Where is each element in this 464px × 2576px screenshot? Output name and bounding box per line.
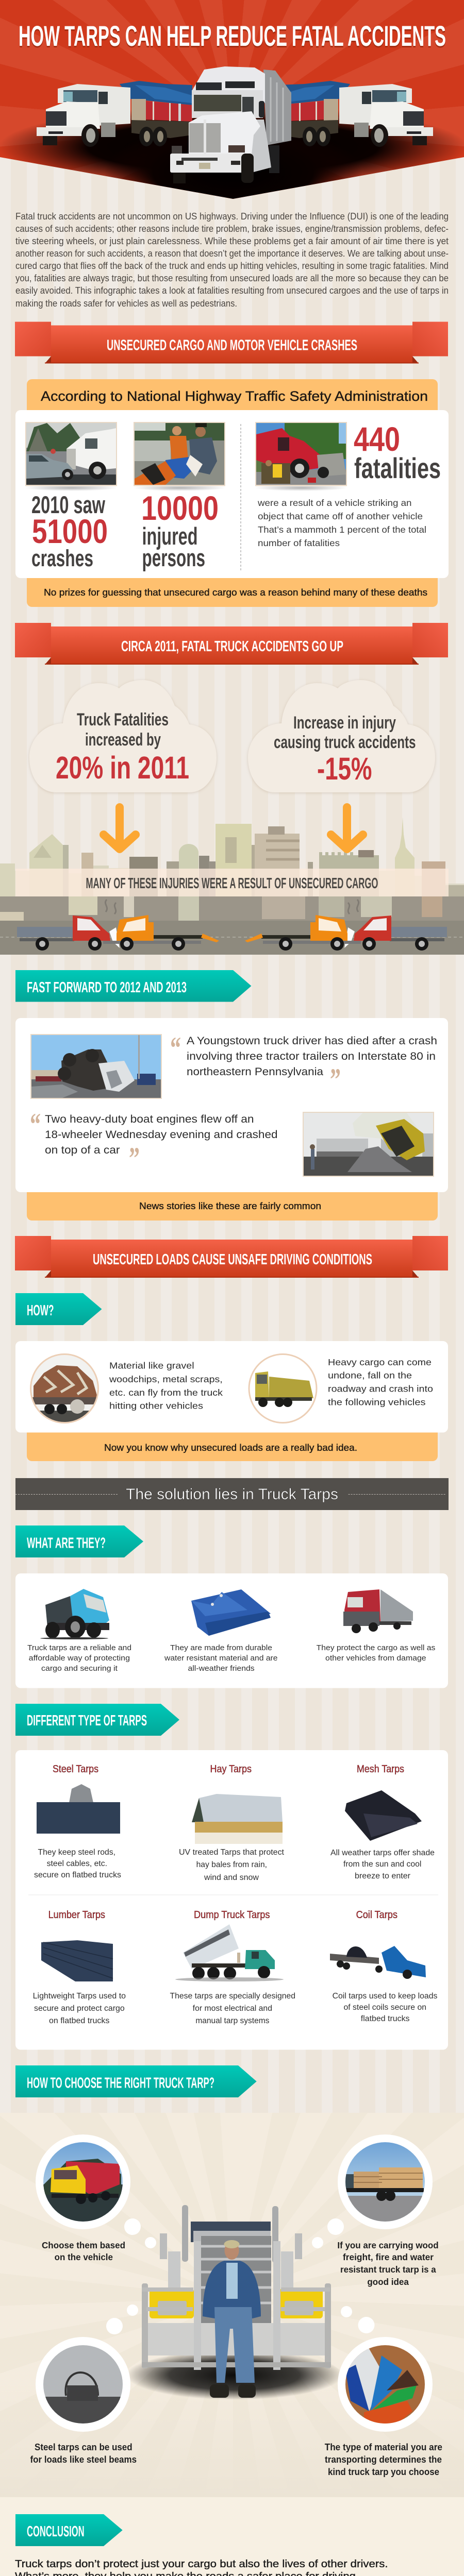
item: lumber tarps: on flatbed trucks bbox=[49, 2016, 110, 2025]
white card bbox=[15, 1750, 448, 2049]
quote 1: involving three tractor trailers on Interstate 80 in bbox=[187, 1050, 436, 1062]
item: coil tarps bbox=[330, 1909, 438, 2023]
icon: scrap load truck photo bbox=[31, 1354, 98, 1423]
stat: 440 fatalities: 440 bbox=[354, 420, 400, 458]
item: hay tarps: UV treated Tarps that protect bbox=[179, 1848, 285, 1857]
text column 1: Truck tarps are a reliable and bbox=[27, 1644, 131, 1652]
text column 3 bbox=[317, 1644, 435, 1663]
quote 2: Two heavy-duty boat engines flew off an bbox=[45, 1113, 254, 1125]
intro paragraph: making the roads safer for vehicles as well as pedestrians. bbox=[15, 298, 237, 309]
item: mesh tarps: All weather tarps offer shade bbox=[330, 1849, 435, 1857]
item: lumber tarps bbox=[33, 1909, 126, 2025]
teal heading: fast forward: FAST FORWARD TO 2012 AND 2013 bbox=[27, 979, 187, 996]
intro paragraph bbox=[15, 211, 449, 309]
orange backing panel bbox=[27, 379, 438, 607]
section background: how to choose bbox=[0, 2113, 464, 2497]
caption: choose based on vehicle: Choose them based bbox=[42, 2240, 125, 2250]
item: hay tarps bbox=[179, 1764, 285, 1882]
item: hay tarps: Hay Tarps bbox=[210, 1764, 252, 1775]
stat: 10000 injured persons: persons bbox=[142, 544, 205, 571]
oval photo: steel tarp ring bbox=[43, 2345, 123, 2424]
stat: 10000 injured persons: 10000 bbox=[141, 489, 219, 527]
cloud: truck fatalities: increased by bbox=[85, 730, 161, 750]
item: dump truck tarps: for most electrical and bbox=[193, 2004, 272, 2013]
conclusion text bbox=[15, 2558, 388, 2576]
item: dump truck tarps: Dump Truck Tarps bbox=[194, 1909, 270, 1921]
bubble: steel tarps bbox=[36, 2337, 130, 2432]
panel heading: According to National Highway Traffic Safety Administration bbox=[41, 388, 428, 404]
photo: paramedics with patient bbox=[133, 422, 226, 491]
quote 1: “ bbox=[170, 1031, 181, 1065]
panel: NHTSA statistics bbox=[15, 379, 449, 607]
item: steel tarps: Steel Tarps bbox=[53, 1764, 98, 1775]
truck front bbox=[142, 2205, 331, 2370]
road bbox=[0, 921, 464, 955]
ribbon heading: circa 2011 bbox=[15, 623, 448, 665]
caption: wood freight: good idea bbox=[367, 2277, 409, 2287]
photo: red dump truck crash bbox=[255, 422, 347, 491]
item: mesh tarps: breeze to enter bbox=[355, 1872, 410, 1880]
item: coil tarps: flatbed trucks bbox=[361, 2014, 410, 2023]
text: heavy cargo: undone, fall on the bbox=[328, 1370, 412, 1381]
quote 2: ” bbox=[129, 1141, 140, 1175]
white card bbox=[15, 1573, 448, 1688]
crash illustration left bbox=[17, 900, 219, 951]
caption: material type bbox=[325, 2442, 442, 2477]
left truck bbox=[37, 81, 192, 147]
caption: wood freight: resistant truck tarp is a bbox=[340, 2264, 436, 2275]
stat: 440 fatalities bbox=[354, 420, 441, 484]
quote 1: ” bbox=[330, 1062, 341, 1096]
caption: material type: The type of material you are bbox=[325, 2442, 442, 2452]
caption: steel tarps bbox=[30, 2442, 137, 2465]
quote 2: “ bbox=[30, 1107, 41, 1141]
item: lumber tarps: Lumber Tarps bbox=[48, 1909, 105, 1921]
stat: 10000 injured persons bbox=[141, 489, 219, 571]
panel: how loads cause harm bbox=[15, 1341, 448, 1461]
stat: 51000 crashes: 2010 saw bbox=[31, 491, 105, 518]
text: heavy cargo: Heavy cargo can come bbox=[328, 1357, 432, 1367]
lower silhouette bbox=[0, 896, 464, 922]
caption: material type: transporting determines the bbox=[325, 2454, 442, 2465]
teal heading: conclusion: CONCLUSION bbox=[27, 2523, 85, 2540]
item: lumber tarps: secure and protect cargo bbox=[34, 2004, 125, 2013]
ribbon heading: unsecured loads bbox=[15, 1236, 448, 1278]
item: mesh tarps: Mesh Tarps bbox=[357, 1764, 404, 1775]
text: material like gravel: woodchips, metal scraps, bbox=[109, 1374, 223, 1384]
dashed divider bbox=[240, 424, 241, 571]
thought bubbles bbox=[106, 2218, 374, 2334]
fatalities description: That’s a mammoth 1 percent of the total bbox=[258, 524, 426, 535]
bubble: wood freight bbox=[338, 2134, 433, 2229]
fatalities description bbox=[257, 498, 426, 548]
arrow right bbox=[331, 807, 363, 849]
caption: wood freight: freight, fire and water bbox=[343, 2252, 434, 2262]
item: lumber tarps: Lightweight Tarps used to bbox=[33, 1992, 126, 2001]
bubble: type of material bbox=[338, 2337, 433, 2432]
photo: truck hitting car bbox=[25, 422, 118, 491]
text: material like gravel: etc. can fly from the truck bbox=[109, 1387, 223, 1398]
teal heading: fast forward bbox=[15, 970, 252, 1002]
cloud: injury accidents: Increase in injury bbox=[293, 713, 396, 733]
white card bbox=[15, 1018, 448, 1192]
fatalities description: object that came off of another vehicle bbox=[258, 511, 423, 521]
fatalities description: were a result of a vehicle striking an bbox=[257, 498, 411, 508]
caption: wood freight bbox=[337, 2240, 439, 2287]
caption: choose based on vehicle bbox=[42, 2240, 125, 2262]
cloud: truck fatalities: 20% in 2011 bbox=[56, 750, 189, 785]
panel footnote: News stories like these are fairly common bbox=[139, 1201, 321, 1211]
text column 2: water resistant material and are bbox=[164, 1654, 277, 1663]
icon: yellow truck photo bbox=[249, 1354, 317, 1423]
item: mesh tarps bbox=[330, 1764, 435, 1880]
section background: conclusion bbox=[0, 2497, 464, 2576]
text column 1: cargo and securing it bbox=[41, 1665, 118, 1673]
item: dump truck tarps: These tarps are specially designed bbox=[170, 1992, 295, 2001]
cloud: truck fatalities: Truck Fatalities bbox=[77, 710, 169, 730]
dark bar heading: the solution bbox=[15, 1478, 449, 1510]
text: material like gravel: Material like gravel bbox=[109, 1360, 194, 1370]
item: steel tarps: secure on flatbed trucks bbox=[34, 1871, 121, 1879]
panel footnote: No prizes for guessing that unsecured cargo was a reason behind many of these deaths bbox=[44, 587, 427, 598]
caption: steel tarps: for loads like steel beams bbox=[30, 2454, 137, 2465]
item: hay tarps: hay bales from rain, bbox=[196, 1860, 267, 1869]
teal heading: what are they bbox=[15, 1526, 143, 1557]
teal heading: how to choose: HOW TO CHOOSE THE RIGHT TRUCK TARP? bbox=[27, 2075, 214, 2092]
banner: many of these injuries bbox=[15, 869, 449, 896]
teal heading: different types: DIFFERENT TYPE OF TARPS bbox=[27, 1713, 147, 1729]
item: coil tarps: of steel coils secure on bbox=[343, 2003, 426, 2012]
oval photo: dump truck bbox=[43, 2142, 123, 2222]
cloud: injury accidents: -15% bbox=[317, 751, 372, 786]
text column 2: They are made from durable bbox=[170, 1644, 272, 1652]
panel: types of tarps bbox=[15, 1750, 448, 2049]
text column 3: other vehicles from damage bbox=[325, 1654, 426, 1663]
white card bbox=[15, 1341, 448, 1432]
oval photo: lumber truck bbox=[345, 2142, 425, 2222]
item: coil tarps: Coil tarps used to keep loads bbox=[333, 1992, 438, 2001]
quote 2: 18-wheeler Wednesday evening and crashed bbox=[45, 1128, 277, 1141]
teal heading: how: HOW? bbox=[27, 1302, 54, 1319]
text column 2 bbox=[164, 1644, 277, 1673]
text column 3: They protect the cargo as well as bbox=[317, 1644, 435, 1652]
centre truck bbox=[170, 66, 291, 183]
header background with rays bbox=[0, 0, 464, 199]
quote 2: on top of a car bbox=[45, 1144, 120, 1156]
intro paragraph: Fatal truck accidents are not uncommon on US highways. Driving under the Influence (DUI) is one of the leading bbox=[15, 211, 449, 222]
text column 2: all-weather friends bbox=[188, 1665, 255, 1673]
orange footer panel bbox=[27, 1427, 438, 1461]
stat: 10000 injured persons: injured bbox=[142, 522, 198, 550]
item: coil tarps: Coil Tarps bbox=[356, 1909, 397, 1921]
caption: material type: kind truck tarp you choose bbox=[328, 2467, 439, 2477]
cloud: injury accidents bbox=[248, 680, 435, 792]
caption: choose based on vehicle: on the vehicle bbox=[55, 2252, 113, 2262]
quote 2 bbox=[30, 1107, 277, 1175]
text: material like gravel: hitting other vehicles bbox=[109, 1401, 203, 1411]
text: material like gravel bbox=[109, 1360, 223, 1411]
image: blue tarp bbox=[191, 1589, 271, 1636]
item: mesh tarps: from the sun and cool bbox=[343, 1860, 421, 1869]
item: dump truck tarps: manual tarp systems bbox=[195, 2016, 270, 2025]
photo: overturned truck bbox=[30, 1034, 162, 1099]
dark bar heading: the solution: The solution lies in Truck Tarps bbox=[126, 1486, 338, 1503]
ribbon heading: circa 2011: CIRCA 2011, FATAL TRUCK ACCIDENTS GO UP bbox=[121, 638, 343, 655]
teal heading: different types bbox=[15, 1704, 179, 1736]
illustration: driver in front of truck bbox=[126, 2205, 343, 2400]
photo: crushed yellow truck bbox=[303, 1112, 434, 1177]
text column 1 bbox=[27, 1644, 131, 1673]
text: heavy cargo: the following vehicles bbox=[328, 1397, 426, 1408]
teal heading: how to choose bbox=[15, 2065, 257, 2097]
item: hay tarps: wind and snow bbox=[204, 1873, 259, 1882]
bubble: choose based on vehicle bbox=[36, 2134, 130, 2229]
arrow left bbox=[104, 807, 136, 849]
item: steel tarps: They keep steel rods, bbox=[38, 1848, 115, 1857]
caption: wood freight: If you are carrying wood bbox=[337, 2240, 439, 2250]
text: heavy cargo: roadway and crash into bbox=[328, 1384, 433, 1394]
oval photo: coloured tarps bbox=[345, 2345, 425, 2424]
header illustration: three trucks bbox=[2, 66, 464, 199]
item: dump truck tarps bbox=[170, 1909, 295, 2025]
quote 1: A Youngstown truck driver has died after a crash bbox=[187, 1035, 437, 1047]
teal heading: what are they: WHAT ARE THEY? bbox=[27, 1535, 106, 1552]
stat: 51000 crashes: 51000 bbox=[32, 512, 108, 550]
conclusion text: Truck tarps don’t protect just your cargo but also the lives of other drivers. bbox=[15, 2558, 388, 2570]
text column 1: affordable way of protecting bbox=[29, 1654, 130, 1663]
quote 1 bbox=[170, 1031, 437, 1096]
caption: steel tarps: Steel tarps can be used bbox=[35, 2442, 132, 2452]
teal heading: conclusion bbox=[15, 2514, 123, 2546]
right truck bbox=[277, 81, 433, 147]
fatalities description: number of fatalities bbox=[258, 538, 340, 548]
panel: what are tarps bbox=[15, 1573, 448, 1688]
image: red and grey truck bbox=[343, 1589, 413, 1633]
text: heavy cargo bbox=[328, 1357, 433, 1408]
stat: 51000 crashes bbox=[31, 491, 108, 571]
intro paragraph: tive steering wheels, or just plain carelessness. While these problems get a fair amount of air time there is yet bbox=[15, 236, 449, 246]
panel: news stories bbox=[15, 1018, 448, 1221]
quote 1: northeastern Pennsylvania bbox=[187, 1065, 323, 1078]
item: steel tarps bbox=[34, 1764, 121, 1879]
ribbon heading: unsecured cargo bbox=[15, 321, 448, 364]
stat: 51000 crashes: crashes bbox=[31, 545, 93, 571]
city skyline illustration bbox=[0, 817, 464, 955]
item: steel tarps: steel cables, etc. bbox=[47, 1859, 107, 1868]
panel footnote: Now you know why unsecured loads are a really bad idea. bbox=[104, 1443, 357, 1453]
orange footer panel bbox=[27, 1185, 438, 1221]
cloud: truck fatalities bbox=[29, 680, 217, 792]
crash illustration right bbox=[245, 900, 447, 951]
image: blue cab truck bbox=[40, 1589, 109, 1639]
white card bbox=[15, 410, 449, 578]
teal heading: how bbox=[15, 1293, 102, 1325]
driver bbox=[203, 2240, 261, 2398]
